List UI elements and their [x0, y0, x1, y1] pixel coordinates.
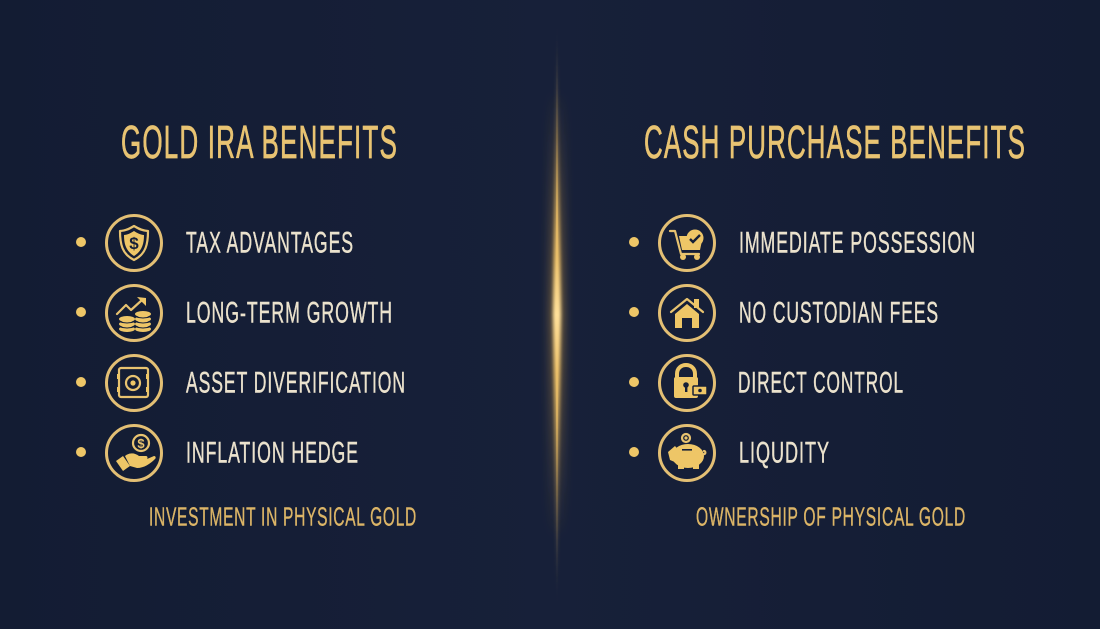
- item: inflation hedge: INFLATION HEDGE: [186, 436, 359, 470]
- item: liquidity: LIQUDITY: [739, 436, 830, 470]
- item: immediate possession: [629, 216, 976, 270]
- heading: gold IRA benefits: GOLD IRA BENEFITS: [121, 116, 398, 168]
- item: direct control: DIRECT CONTROL: [738, 366, 904, 400]
- icon: shopping cart with check: [670, 230, 704, 260]
- item: asset diverification: ASSET DIVERIFICATION: [186, 366, 406, 400]
- item: inflation hedge: [76, 426, 359, 480]
- icon: house: [671, 299, 703, 328]
- icon: shield with dollar: $: [129, 234, 139, 253]
- item: tax advantages: [76, 216, 354, 270]
- item: long-term growth: LONG-TERM GROWTH: [186, 296, 393, 330]
- icon: safe: [117, 368, 149, 397]
- item: no custodian fees: [629, 286, 939, 340]
- icon: hand holding coin: $: [137, 436, 145, 451]
- item: no custodian fees: NO CUSTODIAN FEES: [739, 296, 939, 330]
- icon: piggy bank with coin: [668, 434, 705, 469]
- icon: shield with dollar: [120, 226, 148, 260]
- icon: padlock with banknote: [674, 365, 707, 398]
- center glowing divider: [550, 20, 564, 610]
- panel: cash purchase benefits: [629, 116, 1026, 532]
- panel: gold IRA benefits: [76, 116, 417, 532]
- item: liquidity: [629, 426, 830, 480]
- item: tax advantages: TAX ADVANTAGES: [186, 226, 354, 260]
- item: direct control: [629, 356, 904, 410]
- item: long-term growth: [76, 286, 393, 340]
- icon: coins and rising arrow: [117, 297, 151, 332]
- item: asset diverification: [76, 356, 406, 410]
- icon: hand holding coin: [116, 435, 156, 471]
- caption: investment in physical gold: INVESTMENT IN PHYSICAL GOLD: [149, 502, 417, 532]
